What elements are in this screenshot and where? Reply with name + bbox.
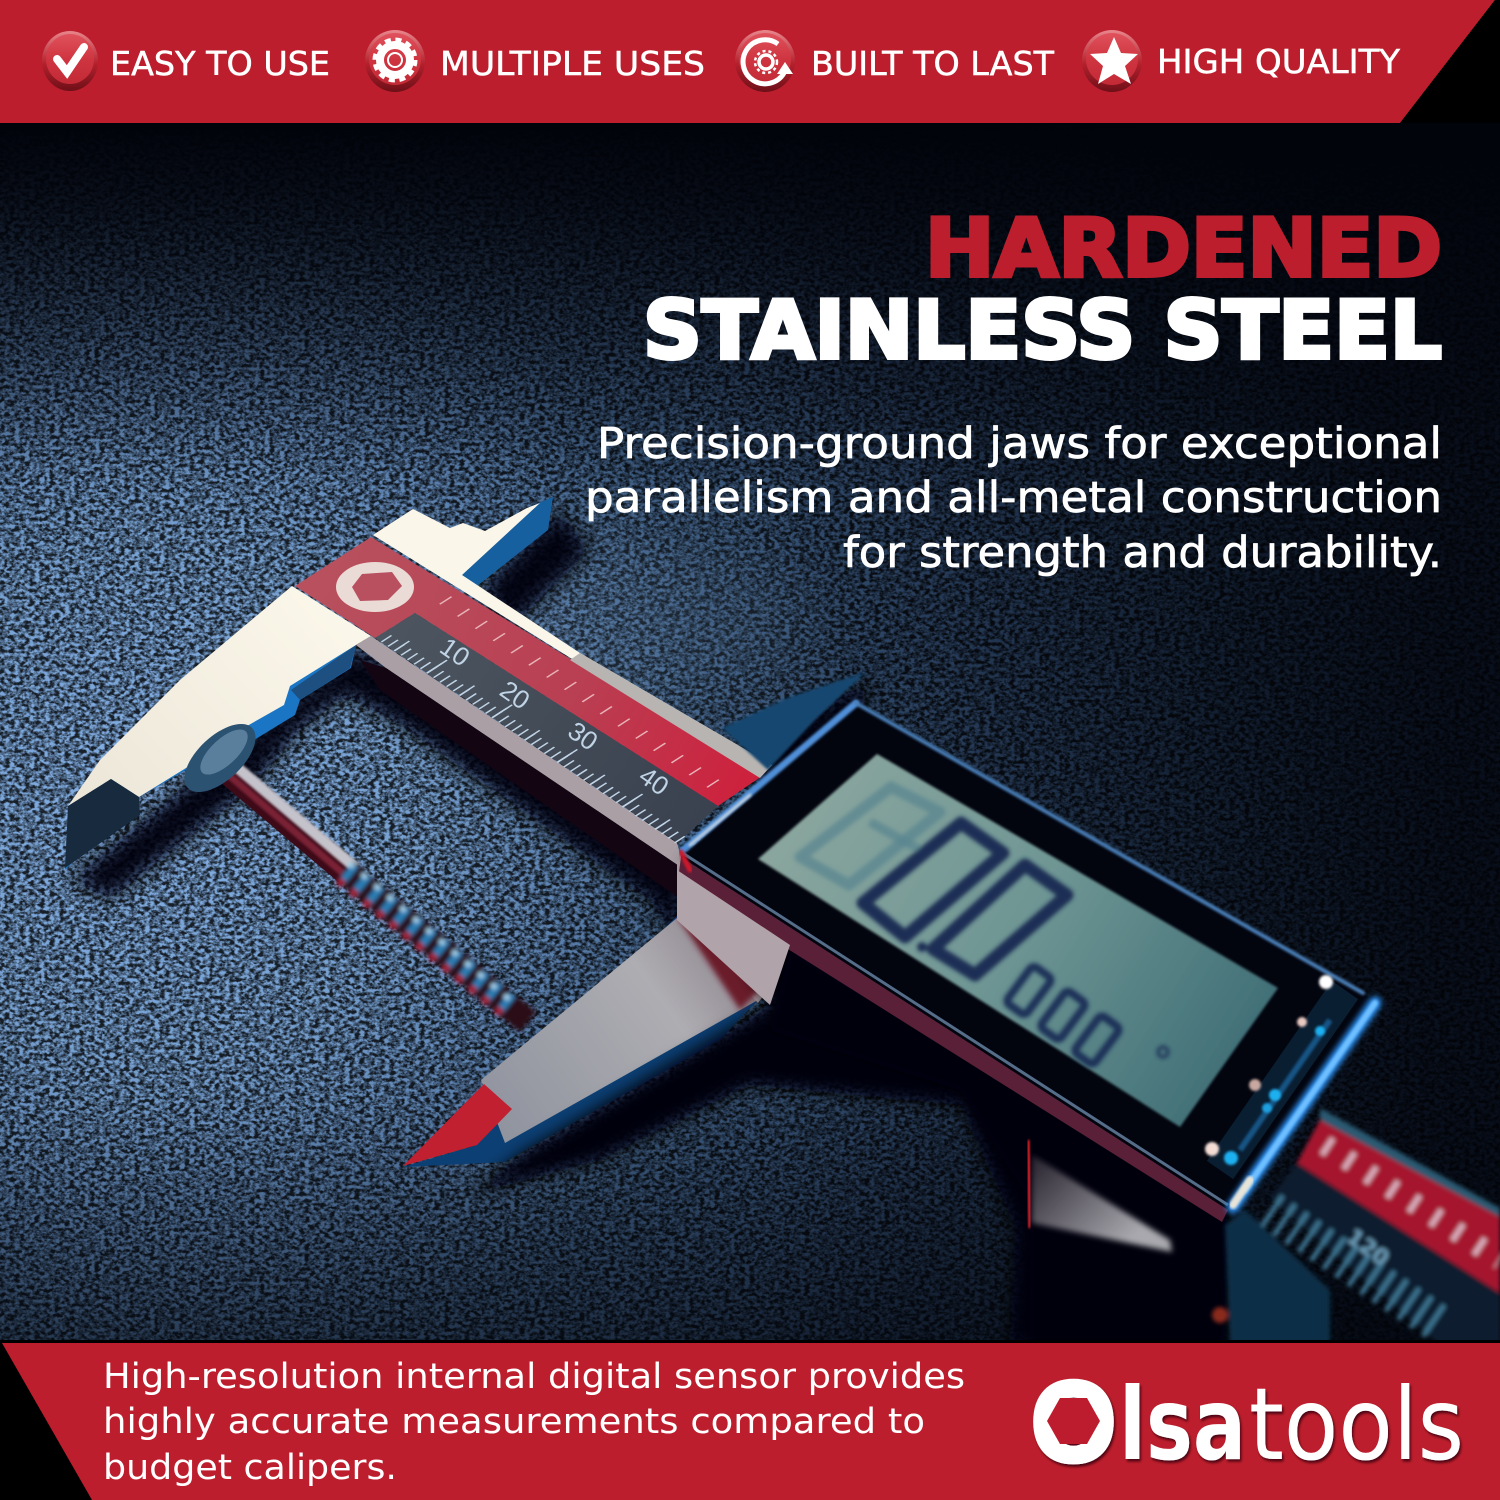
icon: gear with arrow badge <box>735 30 795 92</box>
brand logo: lsa <box>1119 1366 1246 1483</box>
black corner top right <box>1400 0 1500 123</box>
brand logo: O <box>1030 1362 1117 1487</box>
description text: parallelism and all-metal construction <box>585 473 1442 523</box>
scale numbers: 40 <box>634 760 674 802</box>
headline <box>643 202 1442 377</box>
icon: gear badge <box>365 30 425 92</box>
logo ring on scale <box>336 562 414 612</box>
top banner <box>0 0 1495 123</box>
description text: for strength and durability. <box>843 528 1442 578</box>
icon: star badge <box>1082 30 1142 92</box>
red inch ticks <box>445 600 721 789</box>
feature: high quality: HIGH QUALITY <box>1157 42 1401 81</box>
sliding jaw <box>403 860 790 1167</box>
blurred beam right of the head: 120 <box>1341 1225 1393 1272</box>
sensor text: highly accurate measurements compared to <box>103 1402 925 1442</box>
brand logo: tools <box>1249 1366 1464 1483</box>
brand logo <box>1030 1362 1464 1487</box>
sensor text: High-resolution internal digital sensor provides <box>103 1357 965 1397</box>
sensor text <box>103 1357 965 1488</box>
sensor text: budget calipers. <box>103 1448 397 1488</box>
feature: easy to use: EASY TO USE <box>110 44 330 83</box>
icon: check mark badge <box>42 31 98 91</box>
feature: multiple uses <box>365 30 705 92</box>
description text <box>585 419 1442 578</box>
feature: high quality <box>1082 30 1401 92</box>
fixed jaw <box>65 586 371 870</box>
depth rod <box>173 712 528 1022</box>
screw thread <box>338 863 528 1022</box>
headline: HARDENED <box>925 202 1442 295</box>
rod head <box>173 712 267 804</box>
main scale: red band <box>295 537 772 806</box>
description text: Precision-ground jaws for exceptional <box>597 419 1442 469</box>
feature: built to last <box>735 30 1055 92</box>
head housing <box>681 701 1375 1210</box>
digital display head <box>677 701 1375 1222</box>
caliper photo <box>65 497 1500 1345</box>
headline: STAINLESS STEEL <box>643 284 1442 377</box>
buttons and light reflections <box>1205 975 1345 1170</box>
LCD screen <box>758 754 1278 1127</box>
feature: multiple uses: MULTIPLE USES <box>440 44 705 83</box>
bottom banner <box>0 1340 1500 1500</box>
lower silver piece <box>1028 1140 1172 1252</box>
feature: easy to use <box>42 31 330 91</box>
scale numbers: 10 <box>435 631 475 673</box>
scale numbers: 20 <box>495 674 535 716</box>
main scale: grey metric band <box>375 613 718 843</box>
blurred beam right of the head <box>1212 1108 1500 1345</box>
silver lower rim <box>356 636 685 870</box>
scale numbers: 30 <box>563 715 603 757</box>
metric ticks <box>385 635 685 840</box>
body shadow under head <box>470 857 1228 1345</box>
head glowing edges <box>681 703 1375 1207</box>
scale numbers <box>435 631 674 802</box>
LCD digits <box>800 787 1168 1066</box>
upper jaw <box>373 497 772 776</box>
feature: built to last: BUILT TO LAST <box>811 44 1055 83</box>
rear jaw behind head <box>722 672 866 770</box>
cast shadows <box>70 510 870 950</box>
